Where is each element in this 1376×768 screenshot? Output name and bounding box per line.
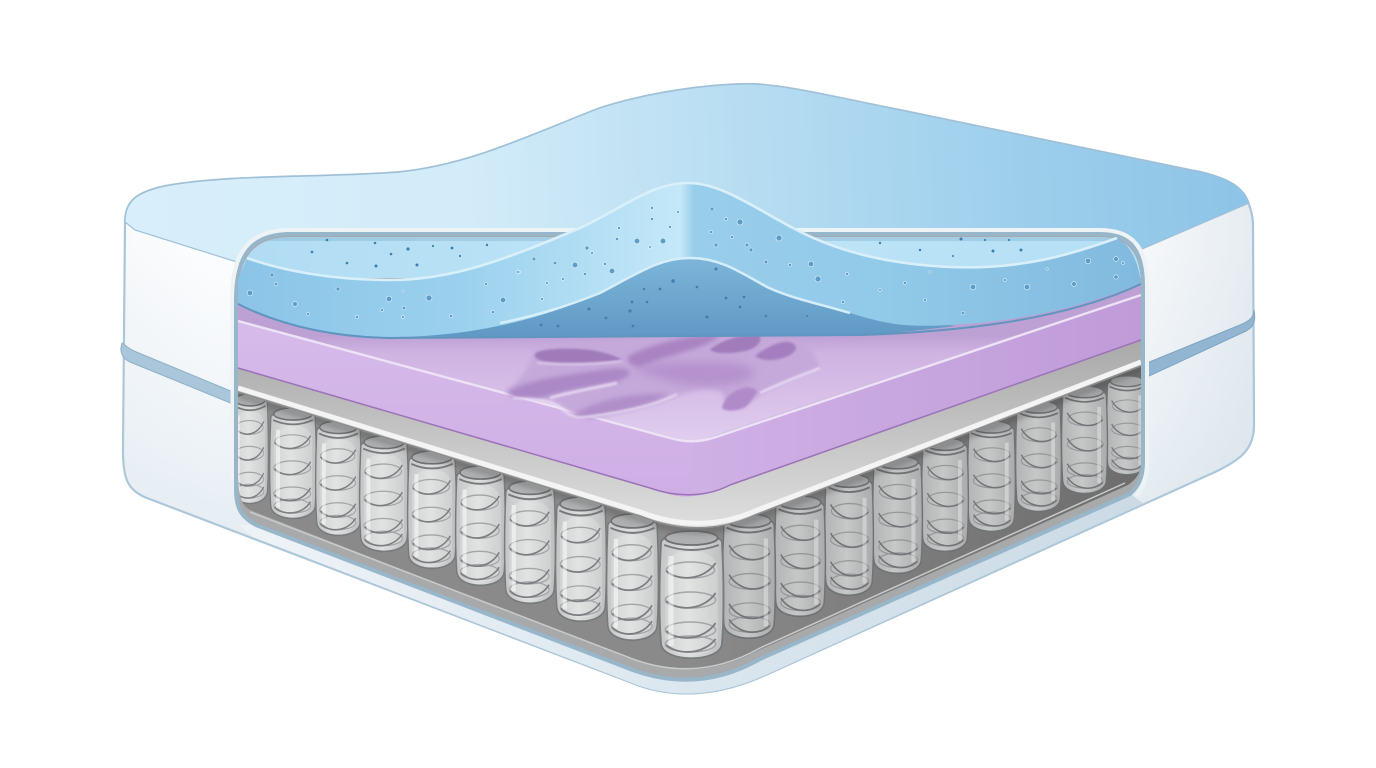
gel foam lower outline xyxy=(238,284,1141,338)
grey layer underside line xyxy=(238,366,1141,528)
pocket spring row xyxy=(232,376,1147,658)
side panel shading xyxy=(123,203,1254,694)
bubbles on back surface xyxy=(311,238,1022,268)
shadow of gel layer on purple foam xyxy=(400,334,900,342)
left seam band xyxy=(121,343,233,404)
grey layer white edge xyxy=(238,362,1141,523)
outer mattress shell xyxy=(123,84,1254,694)
right seam band xyxy=(1147,310,1255,377)
floor strip highlight xyxy=(250,483,1125,669)
handprint impression xyxy=(505,334,820,418)
purple foam lower edge xyxy=(238,340,1141,495)
cutout white frame xyxy=(232,230,1147,496)
gel crest highlight xyxy=(247,183,1117,280)
grey support layer xyxy=(238,330,1141,528)
gel foam under face xyxy=(380,250,955,337)
purple foam edge highlights xyxy=(238,295,1141,441)
purple foam top surface xyxy=(238,270,1141,443)
interior layers xyxy=(232,237,1147,690)
cutout border and grey floor strip xyxy=(236,234,1143,680)
top surface of mattress cover xyxy=(125,84,1249,263)
gel ridge highlight xyxy=(500,258,850,323)
gel foam back surface xyxy=(238,237,1141,278)
bubbles on gel underside xyxy=(540,268,808,327)
gel bubbles xyxy=(247,206,1124,319)
mattress cutaway illustration xyxy=(120,82,1256,695)
purple foam right face xyxy=(693,294,1141,496)
spring chamber floor xyxy=(238,366,1141,669)
gel foam front face xyxy=(238,183,1141,337)
shadow under grey layer xyxy=(238,369,1141,531)
bottom rim panel xyxy=(240,494,1143,694)
top rim shadow xyxy=(238,237,1141,241)
purple foam left face xyxy=(238,320,693,497)
